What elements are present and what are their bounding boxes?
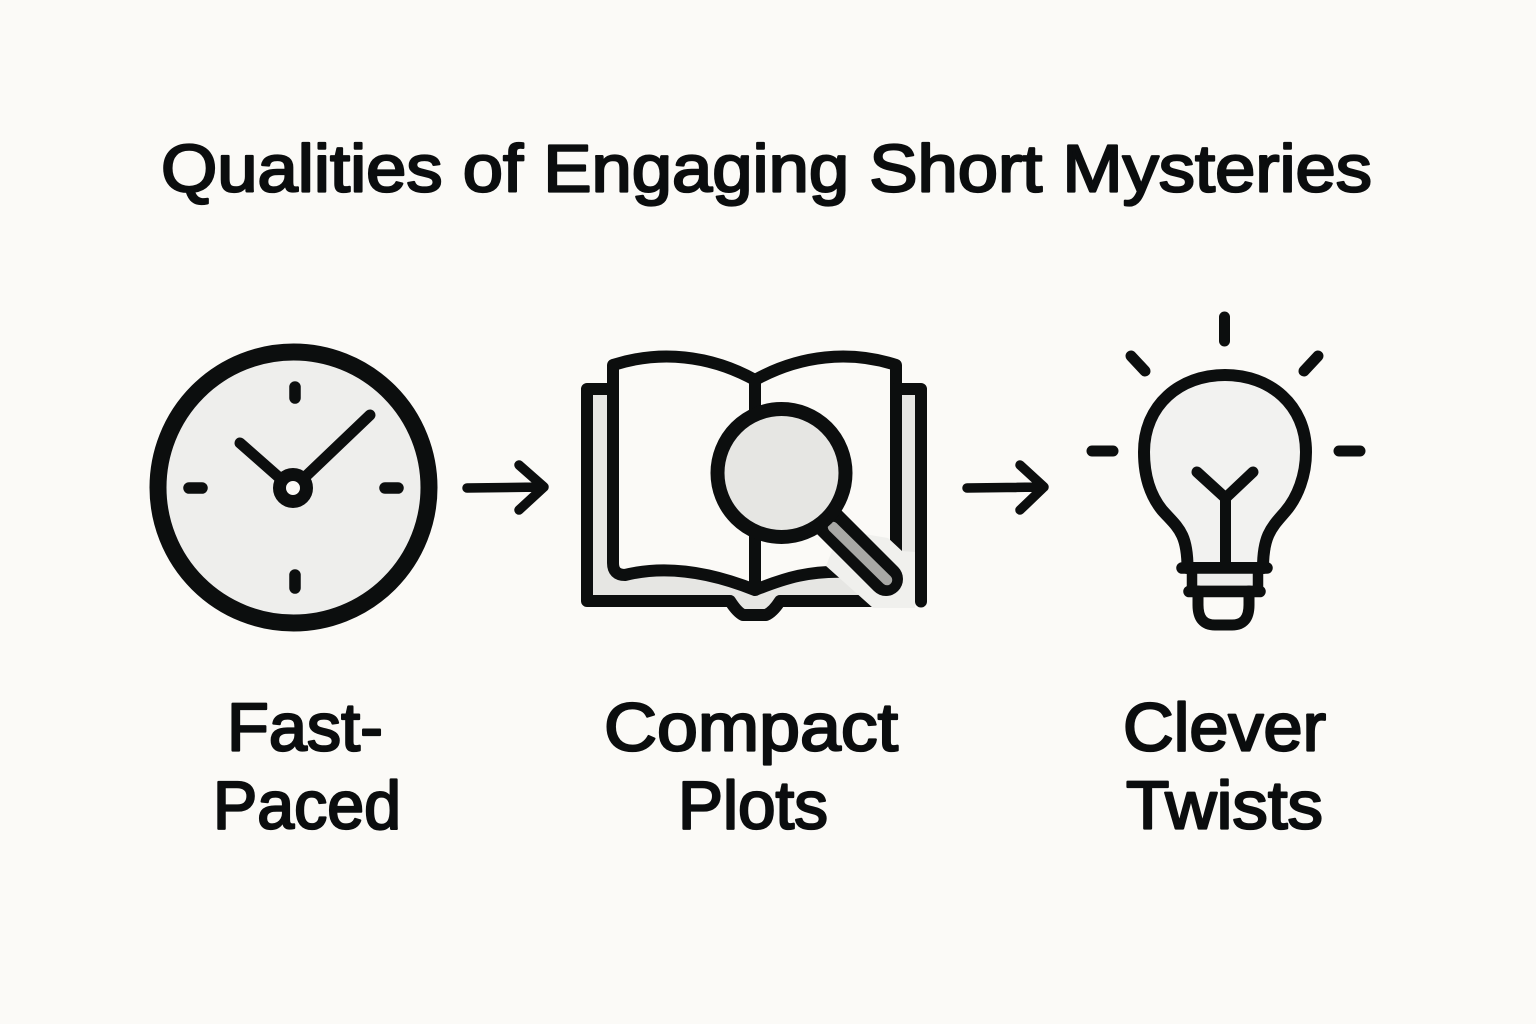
magnifier handle bbox=[820, 513, 886, 579]
spine bbox=[749, 380, 761, 590]
label: Fast-Paced: Fast- bbox=[227, 690, 383, 766]
arrow: book to bulb bbox=[967, 465, 1044, 510]
handle cutout bbox=[826, 530, 915, 608]
right cover edge bbox=[896, 389, 921, 602]
label: Compact Plots: Plots bbox=[678, 768, 828, 844]
icon: book with magnifying glass bbox=[587, 357, 921, 615]
right page bbox=[755, 357, 896, 590]
icon: light bulb bbox=[1092, 317, 1360, 625]
left page bbox=[613, 357, 755, 590]
label: Compact Plots bbox=[604, 690, 898, 844]
label: Fast-Paced: Paced bbox=[213, 768, 401, 844]
label: Clever Twists bbox=[1123, 690, 1326, 844]
label: Compact Plots: Compact bbox=[604, 690, 898, 766]
label: Fast-Paced bbox=[213, 690, 401, 844]
icon: clock bbox=[158, 352, 429, 623]
magnifier lens bbox=[718, 409, 846, 537]
arrow: clock to book bbox=[467, 465, 544, 510]
label: Clever Twists: Clever bbox=[1123, 690, 1326, 766]
title: Qualities of Engaging Short Mysteries bbox=[161, 132, 1372, 206]
label: Clever Twists: Twists bbox=[1126, 768, 1323, 844]
book cover bbox=[587, 389, 921, 615]
